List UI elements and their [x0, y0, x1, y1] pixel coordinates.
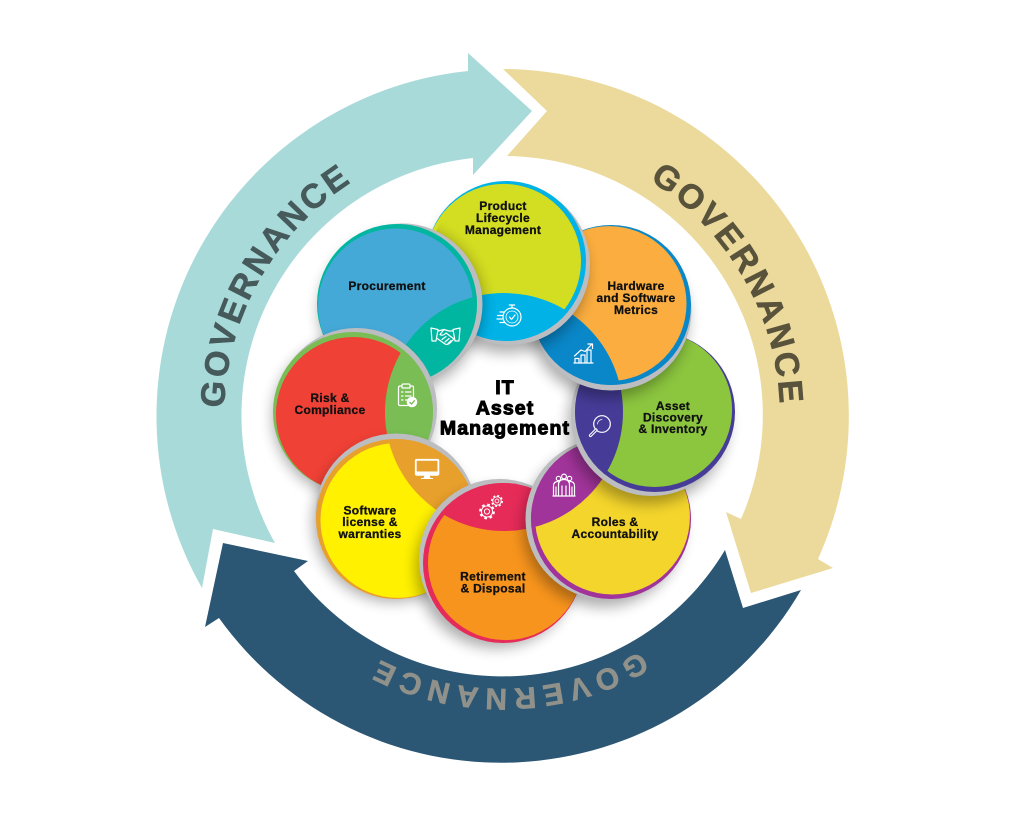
label: procurement: Procurement — [348, 279, 426, 293]
icon: stopwatch — [497, 305, 521, 326]
panel: software license circle — [305, 434, 472, 610]
icon: growth chart — [574, 344, 593, 363]
arrow: teal governance — [156, 53, 532, 588]
label: product lifecycle management: Management — [465, 223, 541, 237]
panel: roles and accountability circle — [515, 444, 691, 615]
label: risk and compliance: Compliance — [294, 403, 366, 417]
arrow: beige governance — [503, 69, 849, 593]
label: hardware and software metrics: and Software — [597, 291, 675, 305]
label: product lifecycle management: Lifecycle — [476, 211, 530, 225]
panel: hardware and software metrics circle — [525, 225, 696, 404]
label: asset discovery and inventory: Asset — [656, 399, 690, 413]
label: risk and compliance: Risk & — [310, 391, 350, 405]
label: hardware and software metrics: Metrics — [614, 303, 658, 317]
label: asset discovery and inventory: & Inventory — [638, 422, 708, 436]
label: retirement and disposal: Retirement — [460, 570, 526, 584]
icon: clipboard with check — [398, 384, 417, 407]
icon: handshake — [431, 328, 460, 344]
icon: monitor — [415, 460, 439, 479]
label: roles and accountability: Roles & — [592, 515, 638, 529]
icon: magnifier — [590, 416, 610, 436]
panel: procurement overlap over product lifecycle — [400, 224, 491, 376]
label: product lifecycle management: Product — [479, 199, 527, 213]
panel: retirement and disposal circle — [408, 479, 578, 656]
label: software license and warranties: license & — [342, 515, 398, 529]
panel: product lifecycle circle — [431, 181, 595, 361]
title: IT Asset Management: Management — [440, 418, 570, 440]
label: roles and accountability: Accountability — [572, 527, 658, 541]
label: hardware and software metrics: Hardware — [607, 279, 665, 293]
icon: people group — [553, 474, 575, 496]
label: retirement and disposal: & Disposal — [460, 582, 526, 596]
label: asset discovery and inventory: Discovery — [643, 410, 703, 424]
label: software license and warranties: Software — [343, 504, 397, 518]
text: governance teal: GOVERNANCE — [200, 164, 350, 406]
text: governance navy: GOVERNANCE — [372, 654, 646, 710]
title: IT Asset Management: IT — [495, 377, 515, 399]
panel: procurement circle — [311, 224, 481, 392]
label: software license and warranties: warranties — [337, 527, 402, 541]
panel: risk and compliance circle — [265, 328, 441, 496]
title: IT Asset Management: Asset — [476, 398, 534, 420]
icon: gears — [480, 496, 502, 518]
arrow: navy governance — [205, 543, 801, 763]
panel: asset discovery circle — [560, 338, 736, 512]
text: governance beige: GOVERNANCE — [654, 165, 804, 402]
